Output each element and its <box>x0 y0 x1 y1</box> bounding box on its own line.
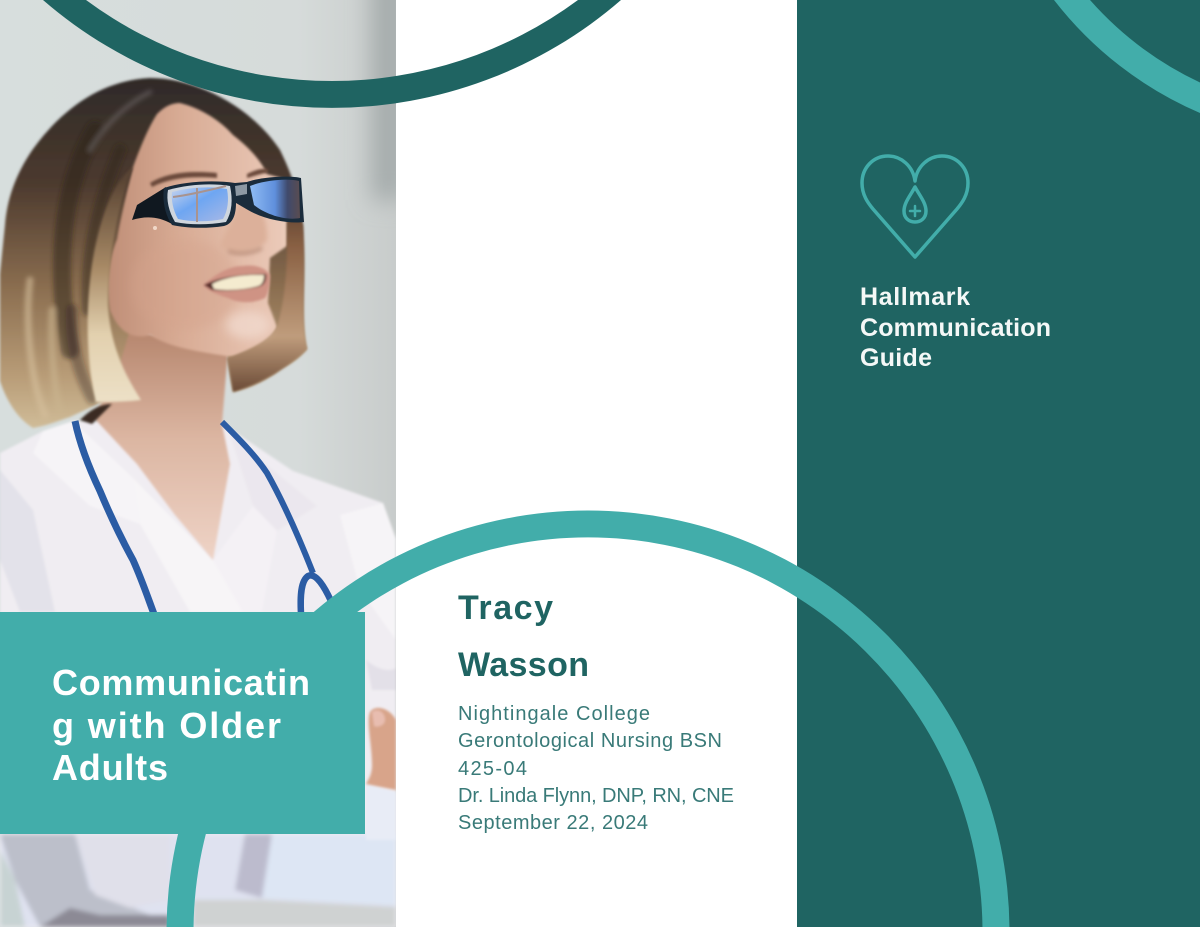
arc: top dark teal ring <box>43 0 621 108</box>
photo: hair strands <box>28 92 150 415</box>
photo: mouth <box>203 265 270 302</box>
arc: large teal ring <box>167 511 1009 927</box>
photo: blond strand <box>88 167 141 402</box>
photo: mole <box>153 226 157 230</box>
panel: title box <box>0 612 365 834</box>
photo: eyebrows <box>150 169 268 187</box>
photo: sleeve <box>367 792 396 839</box>
text block: course details: Dr. Linda Flynn, DNP, RN, CNE <box>458 785 734 807</box>
photo: hair back <box>0 78 307 428</box>
heading: guide name: Communication <box>860 314 1051 342</box>
photo: coat <box>0 421 396 927</box>
icon: heart with drop <box>862 156 968 257</box>
photo: coat lower section <box>0 834 396 927</box>
photo: chin highlight <box>226 311 270 339</box>
arc: top right teal ring <box>1054 0 1200 113</box>
photo: hair at neck <box>80 404 112 424</box>
photo: hand <box>366 708 396 790</box>
text block: course details: Nightingale College <box>458 703 650 725</box>
title: g with Older <box>52 705 281 746</box>
photo: cheek shading <box>214 258 231 312</box>
title: Communicatin <box>52 662 310 703</box>
text block: course details: September 22, 2024 <box>458 812 648 834</box>
heading: guide name: Hallmark <box>860 283 970 311</box>
heading: author name: Wasson <box>458 646 589 684</box>
text block: course details: Gerontological Nursing BSN <box>458 730 722 752</box>
photo: right hair <box>226 222 308 394</box>
panel: dark teal column <box>797 0 1200 927</box>
text block: course details: 425-04 <box>458 758 527 780</box>
photo: stethoscope <box>75 421 331 614</box>
photo: wall shadow <box>372 0 406 200</box>
heading: author name: Tracy <box>458 589 553 627</box>
photo: face <box>108 103 288 357</box>
photo: wall <box>0 0 396 927</box>
heading: guide name: Guide <box>860 344 932 372</box>
photo: neck <box>93 330 230 560</box>
photo: nose <box>220 200 267 253</box>
photo: glasses <box>132 177 304 228</box>
panel: photo of smiling nurse <box>0 0 406 927</box>
title: Adults <box>52 747 168 788</box>
